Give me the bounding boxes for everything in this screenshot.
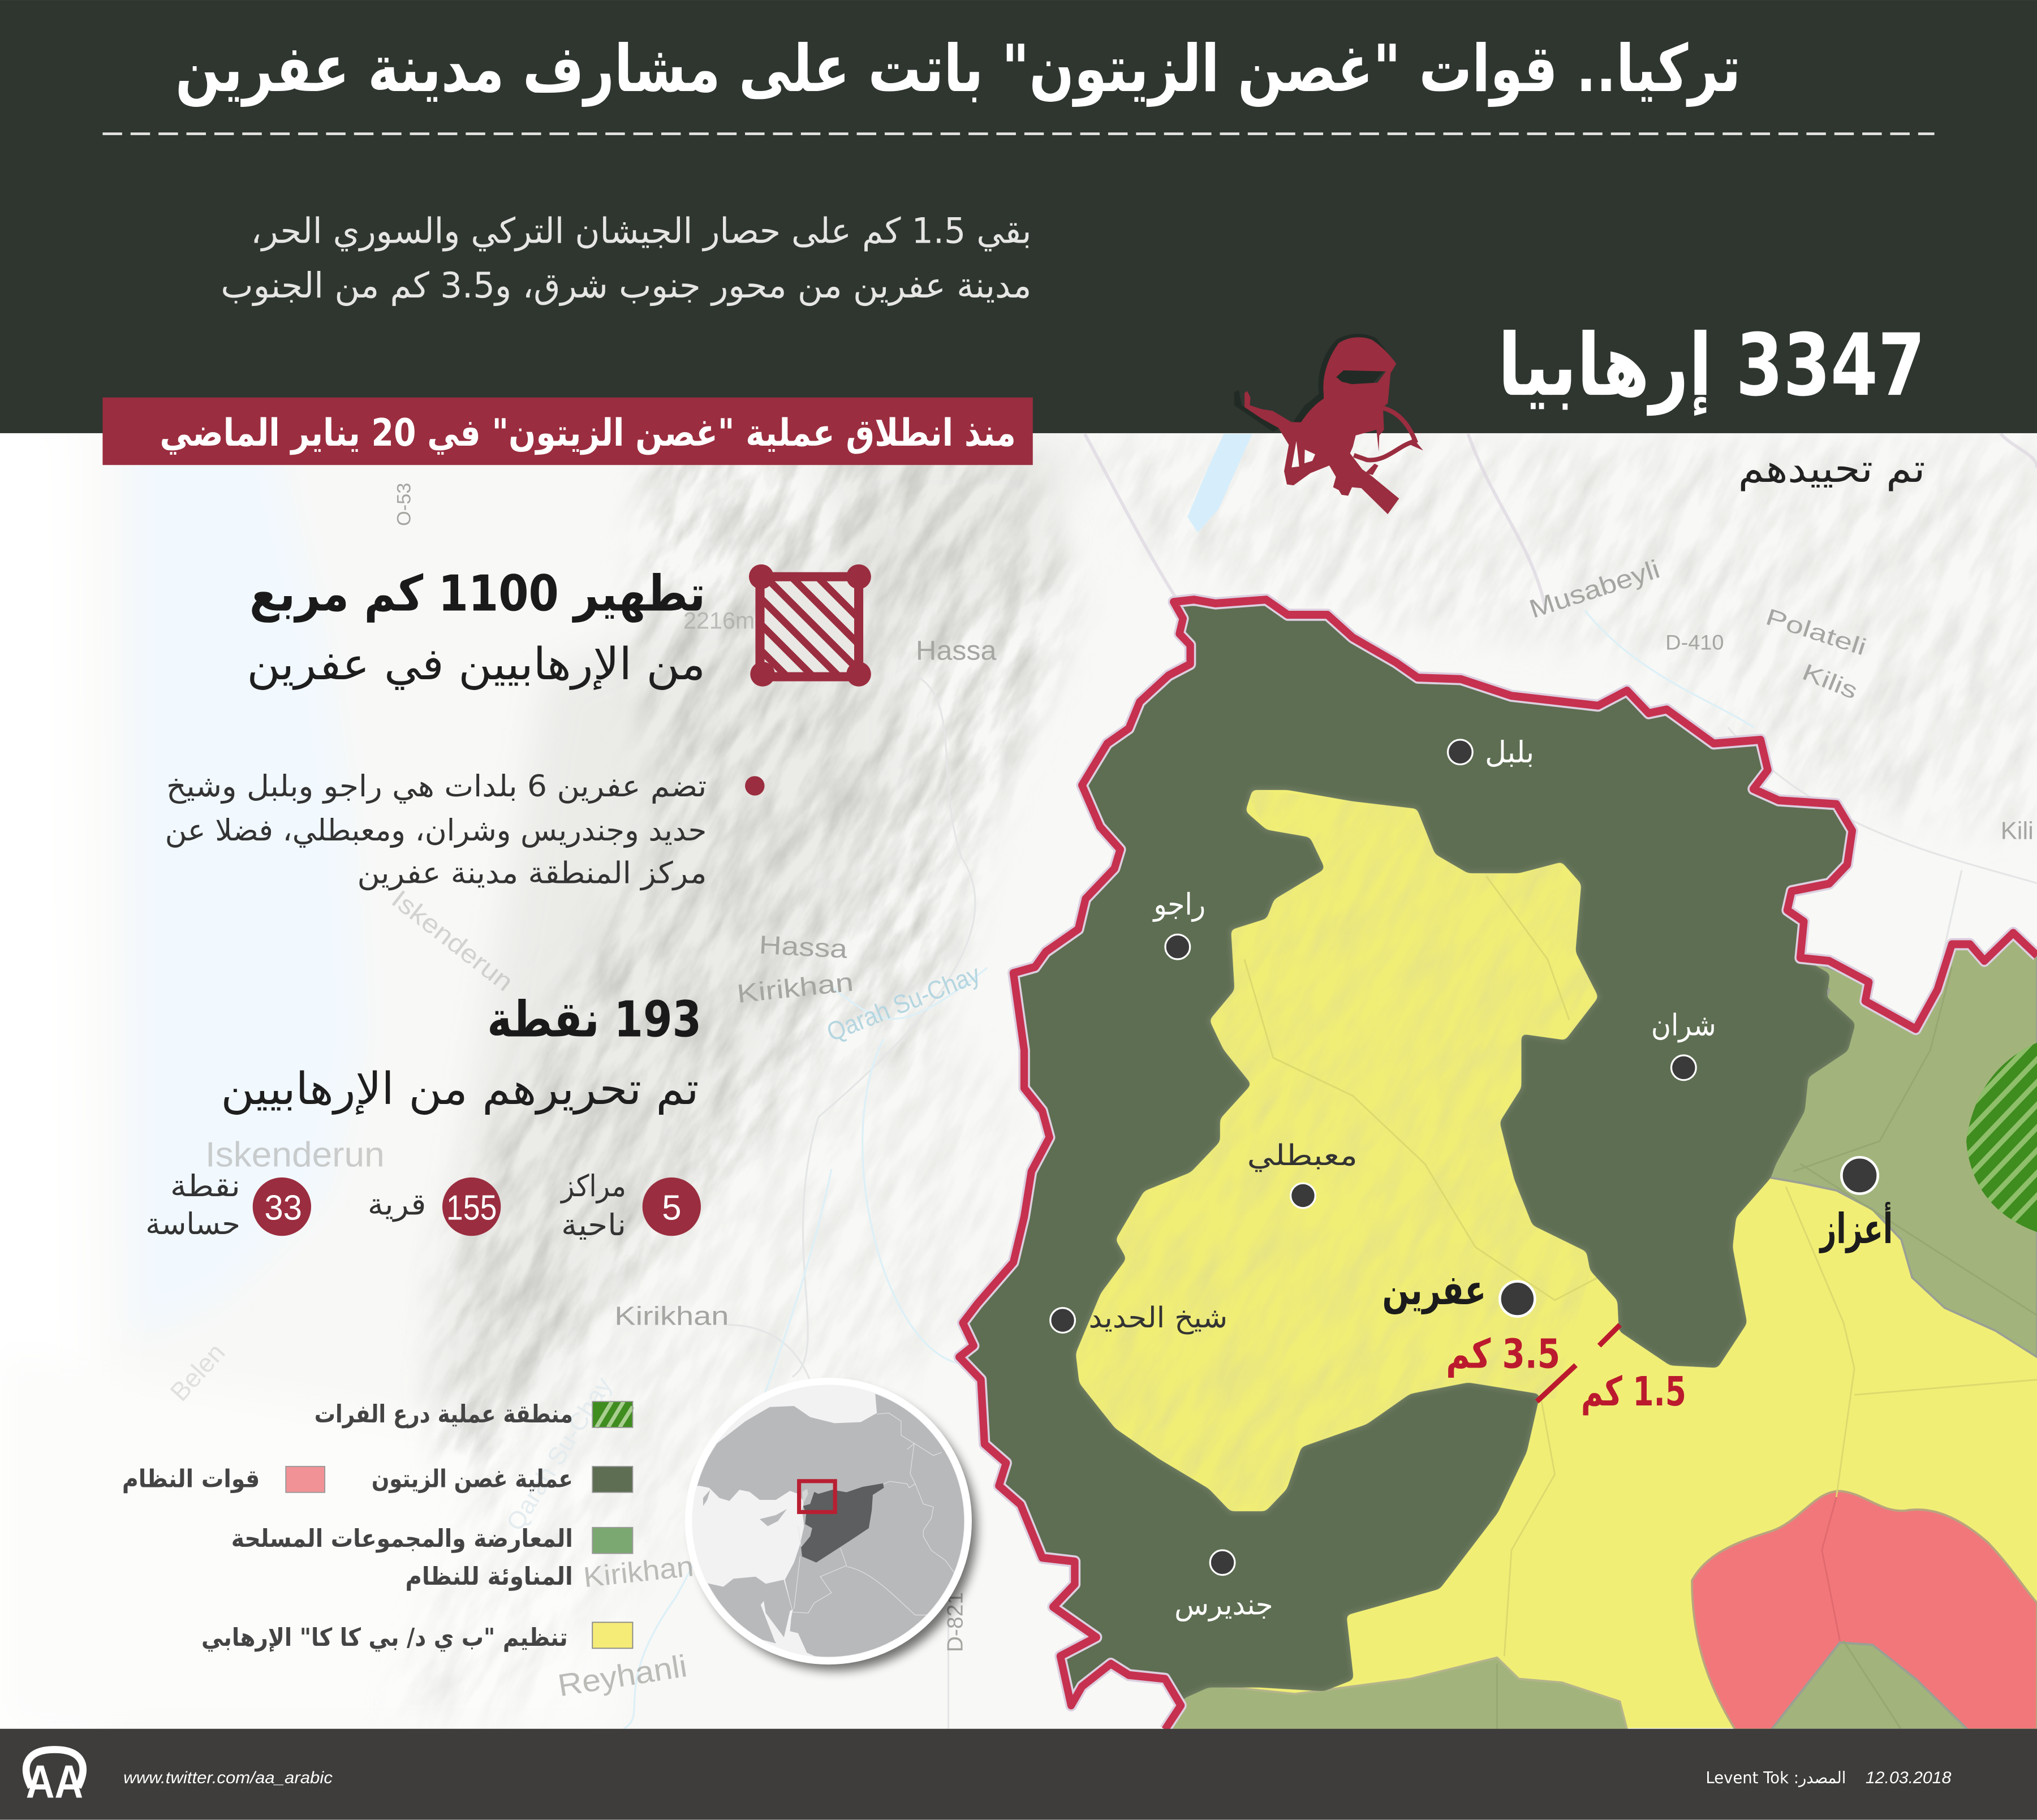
distance marks: 3.5 كم (1446, 1330, 1560, 1378)
stat block: liberated points (221, 991, 701, 1115)
map place labels: Reyhanli (555, 1648, 690, 1703)
map place labels: Kilis (1799, 659, 1862, 704)
text block: towns (165, 769, 765, 891)
locator map (685, 1378, 977, 1672)
stat block: cleared area: من الإرهابيين في عفرين (247, 639, 705, 691)
map place labels: Kirikhan (735, 967, 855, 1008)
subtitle: بقي 1.5 كم على حصار الجيشان التركي والسوري الحر، (251, 210, 1031, 251)
map place labels: Polateli (1763, 603, 1870, 661)
stat caption: تم تحييدهم (1738, 446, 1925, 491)
yellow terrain (1107, 792, 1588, 1493)
town labels: عفرين (1383, 1266, 1486, 1314)
map place labels: Musabeyli (1526, 554, 1663, 624)
town labels: شران (1651, 1008, 1716, 1042)
map place labels: Qarah Su-Chay (501, 1373, 617, 1536)
town labels: معبطلي (1247, 1138, 1358, 1172)
text block: towns: تضم عفرين 6 بلدات هي راجو وبلبل وشيخ (166, 769, 707, 804)
map place labels: Iskenderun (386, 884, 519, 997)
town labels: شيخ الحديد (1089, 1301, 1228, 1335)
zone: opposition south (1771, 1642, 1968, 1730)
town markers (1050, 740, 1878, 1575)
footer date: 12.03.2018 (1866, 1769, 1952, 1787)
logo: AA: AA (26, 1755, 83, 1808)
map place labels: 2216m (683, 608, 755, 634)
counters: 33 (264, 1188, 302, 1227)
footer url: www.twitter.com/aa_arabic (123, 1769, 333, 1787)
counters: حساسة (145, 1207, 240, 1241)
legend (122, 1400, 632, 1652)
banner: منذ انطلاق عملية "غصن الزيتون" في 20 يناير الماضي (160, 411, 1016, 455)
map place labels: D-410 (1665, 631, 1724, 654)
stat block: cleared area: تطهير 1100 كم مربع (249, 564, 705, 623)
map place labels: O-53 (394, 483, 415, 526)
legend: regime forces: قوات النظام (122, 1465, 260, 1494)
footer source: المصدر: Levent Tok (1706, 1768, 1846, 1787)
distance marks (1446, 1325, 1686, 1416)
Turkey-Syria border line (959, 600, 2037, 1730)
legend: opposition: المعارضة والمجموعات المسلحة (231, 1525, 573, 1553)
zone: PYD/PKK yellow (1013, 770, 2037, 1728)
town labels (1089, 735, 1893, 1622)
legend: Euphrates Shield: منطقة عملية درع الفرات (315, 1400, 573, 1429)
map place labels: Qarah Su-Chay (822, 959, 984, 1047)
legend: Olive Branch: عملية غصن الزيتون (372, 1465, 573, 1494)
text block: towns: مركز المنطقة مدينة عفرين (358, 856, 707, 891)
stat block: cleared area (247, 564, 705, 691)
stat block: liberated points: 193 نقطة (487, 991, 701, 1049)
banner (102, 398, 1033, 465)
stat: neutralized terrorists: 3347 إرهابيا (1498, 315, 1925, 416)
map place labels: Kili (2001, 818, 2034, 845)
town labels: جنديرس (1174, 1588, 1273, 1622)
land north and east (689, 1389, 972, 1672)
map place labels: Hassa (916, 636, 997, 666)
counters: قرية (368, 1187, 426, 1222)
counters: ناحية (561, 1208, 626, 1243)
map place labels: D-821 (944, 1592, 968, 1652)
icon: hatched square (749, 564, 871, 687)
town labels: أعزاز (1819, 1202, 1893, 1253)
town labels: راجو (1152, 887, 1205, 922)
counters (145, 1169, 701, 1243)
counters: نقطة (170, 1169, 240, 1204)
footer (0, 1729, 2037, 1820)
legend: opposition (231, 1525, 632, 1591)
zone: regime forces (1692, 1491, 2037, 1730)
legend: PYD/PKK: تنظيم "ب ي د/ بي كا كا" الإرهابي (201, 1624, 568, 1652)
map place labels: Belen (164, 1338, 231, 1407)
zone: Olive Branch operation (959, 600, 1854, 1728)
Syria (801, 1483, 884, 1563)
map place labels: Kirikhan (582, 1550, 695, 1593)
map place labels (164, 483, 2034, 1703)
zone: opposition north-east (1770, 937, 2037, 1357)
text block: towns: حديد وجندريس وشران، ومعبطلي، فضلا عن (165, 813, 707, 848)
counters: 5 (662, 1188, 682, 1227)
control zones map (954, 594, 2037, 1729)
subtitle (221, 210, 1031, 306)
counters: مراكز (559, 1169, 626, 1204)
counters: 155 (446, 1188, 497, 1227)
distance marks: 1.5 كم (1581, 1368, 1686, 1416)
map background (0, 390, 2037, 1766)
land: Africa (699, 1577, 792, 1644)
legend: opposition: المناوئة للنظام (406, 1563, 573, 1591)
stat block: liberated points: تم تحريرهم من الإرهابيين (221, 1064, 699, 1115)
icon: masked gunman (1234, 334, 1423, 514)
map place labels: Kirikhan (614, 1301, 729, 1331)
zone: opposition bottom (1165, 1658, 1627, 1730)
map place labels: Hassa (759, 930, 849, 964)
header panel (0, 0, 2037, 433)
town labels: بلبل (1485, 735, 1534, 770)
map place labels: Iskenderun (205, 1135, 385, 1174)
subtitle: مدينة عفرين من محور جنوب شرق، و3.5 كم من الجنوب (221, 265, 1031, 306)
zone: Euphrates Shield hatch (1966, 1043, 2037, 1232)
